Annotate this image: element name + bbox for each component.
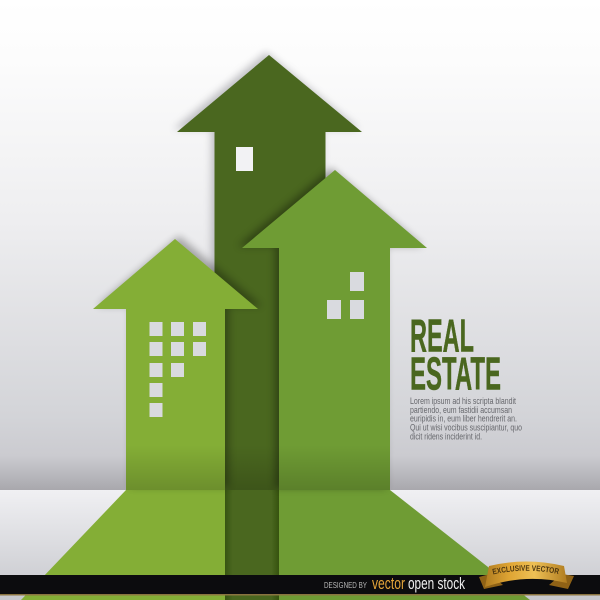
arrow: light green building — [93, 236, 262, 490]
footer bar — [0, 574, 600, 596]
dark shaft on floor — [225, 490, 279, 600]
green floor trapezoid — [21, 490, 530, 600]
body text: Lorem ipsum ad his scripta blandit — [410, 396, 516, 406]
icon: dark building window — [236, 147, 253, 171]
badge: exclusive vector ribbon: EXCLUSIVE VECTOR — [492, 565, 559, 574]
body text: euripidis in, eum liber hendrerit an. — [410, 414, 517, 424]
light building windows — [150, 322, 206, 417]
heading: REAL — [410, 310, 474, 362]
arrow: dark tall building — [174, 52, 362, 600]
footer credit: DESIGNED BY — [324, 581, 368, 590]
horizon shadow on buildings — [126, 445, 390, 490]
body text: partiendo, eum fastidii accumsan — [410, 405, 512, 415]
arrow: medium green building — [238, 168, 427, 490]
heading: ESTATE — [410, 348, 501, 400]
badge: exclusive vector ribbon — [479, 562, 574, 589]
footer credit: vector — [372, 574, 405, 593]
medium building windows — [327, 272, 364, 319]
body text: dicit ridens inciderint id. — [410, 432, 482, 442]
footer credit: open stock — [408, 574, 465, 593]
body text: Qui ut wisi vocibus suscipiantur, quo — [410, 422, 522, 432]
floor — [0, 490, 600, 600]
